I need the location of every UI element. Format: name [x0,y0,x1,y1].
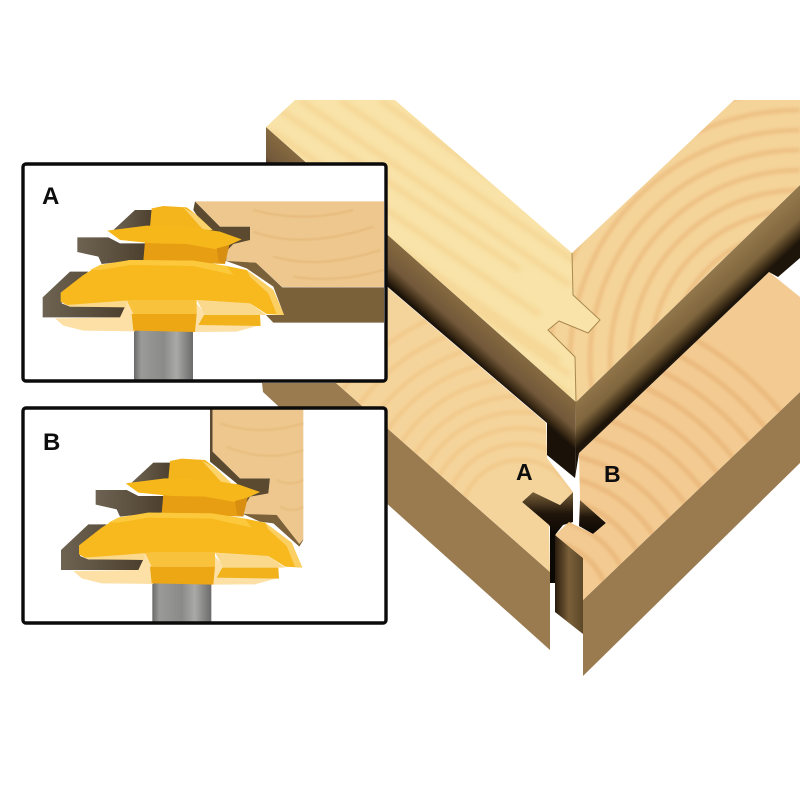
panel B: bit cutting board B [23,408,386,644]
workpiece B dark faces [210,408,303,547]
upper right board top face [548,100,800,402]
router bit A [43,206,284,392]
workpiece A grain [253,210,383,279]
lower right board top face [555,272,800,600]
panel B contents [61,408,303,644]
wooden boards: lock miter joint [262,100,800,676]
panel B label: B [43,429,60,456]
joint seam line [548,253,600,402]
workpiece A dark faces [193,201,384,323]
workpiece B top face [213,409,303,544]
upper right board side face [575,185,800,478]
upper left board top face [260,95,605,405]
lower left board side face [262,383,550,650]
lower left board top face [336,288,573,572]
panel A contents [43,201,384,392]
panel B border [23,408,386,623]
inner dark joint faces [522,492,606,634]
upper left board side face [266,127,576,478]
panel A: bit cutting board A [23,164,386,392]
label A on joint: A [516,459,533,485]
label B on joint: B [604,461,621,487]
workpiece B grain [220,423,303,510]
lower right board side face [583,392,800,676]
panel A label: A [42,183,59,210]
panel A border [23,164,386,381]
router bit B [61,458,302,622]
workpiece A top face [195,201,384,287]
